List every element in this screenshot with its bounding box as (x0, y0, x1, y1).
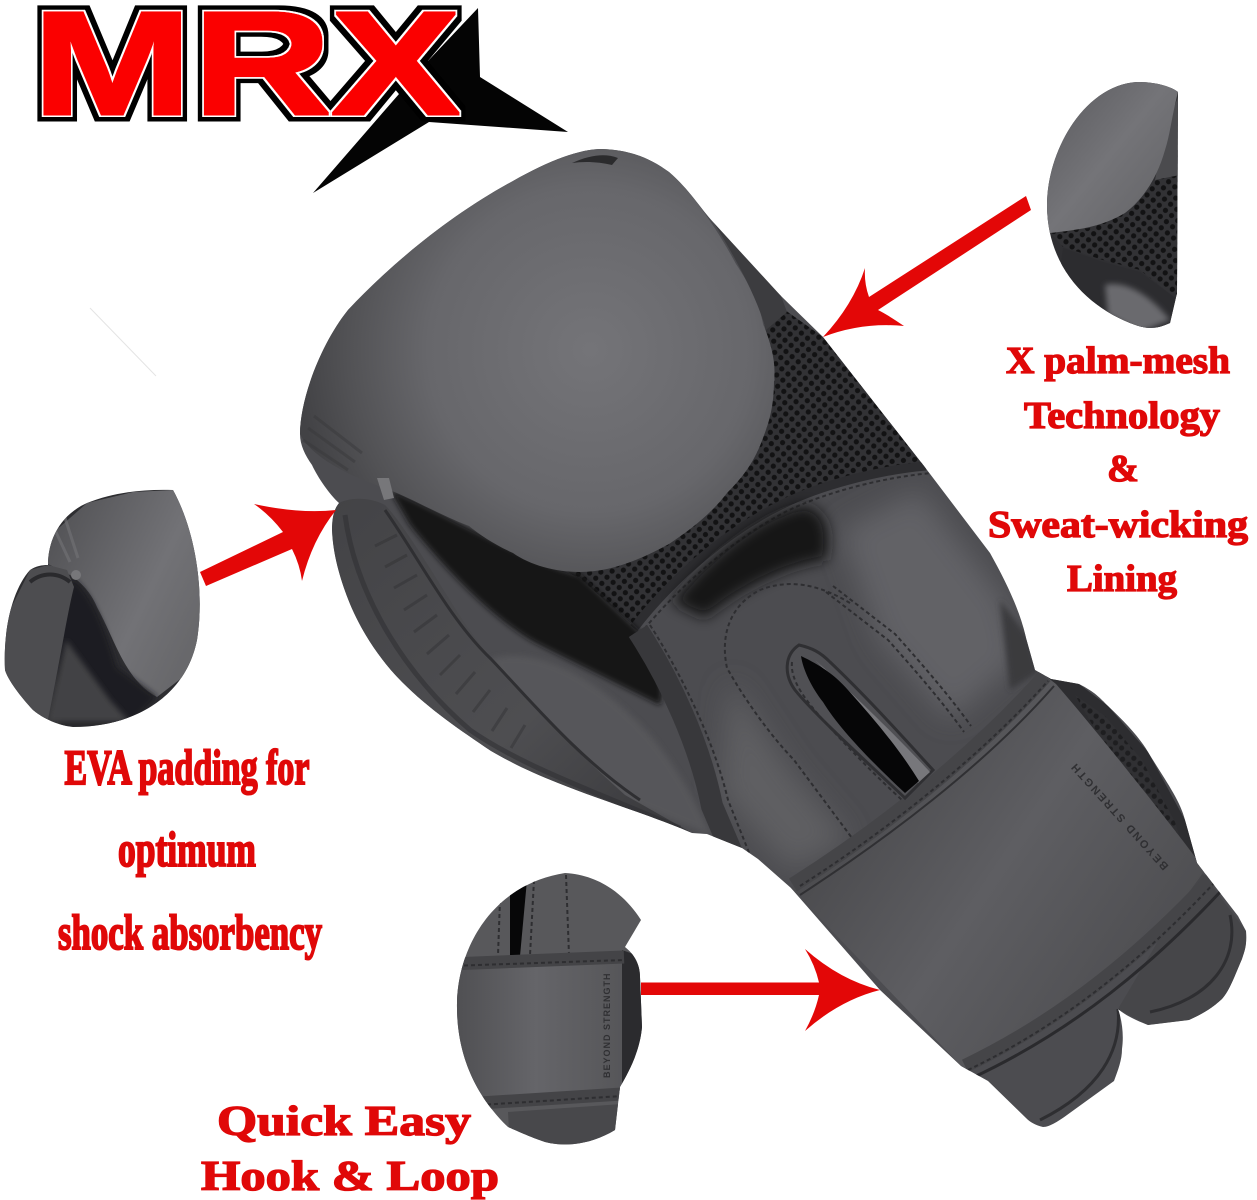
inset wrinkles (55, 518, 78, 562)
fist vent (572, 155, 618, 165)
callout: EVA padding: EVA padding for (64, 739, 310, 795)
thumb hole stitching (792, 662, 902, 800)
inset strap lower stitching (480, 1096, 622, 1105)
inset mesh (1050, 150, 1178, 300)
strap top piping dark edge (800, 686, 1054, 895)
lower palm highlight (720, 702, 840, 865)
arrow: EVA padding (200, 504, 336, 586)
fist knuckle wrinkles (303, 416, 362, 470)
shaded glove interior (332, 300, 1246, 1120)
mesh panel (565, 300, 924, 626)
strap lower piping (965, 878, 1212, 1066)
glove silhouette (300, 149, 1246, 1127)
inset lower pad (1061, 263, 1176, 328)
faint stray line (90, 308, 156, 376)
callout: hook and loop (201, 1099, 499, 1200)
palm seam stitching (640, 473, 932, 634)
palm highlights (840, 490, 1020, 720)
callout: palm mesh (988, 340, 1248, 600)
thumb hole light lip (815, 660, 930, 783)
strap print: BEYOND STRENGTH (1068, 759, 1171, 872)
inset slot (510, 880, 527, 956)
inset: EVA padding (0, 485, 205, 735)
fist upper-right shoulder (714, 223, 787, 330)
strap top stitching (800, 681, 1048, 886)
thumb wrinkles (375, 535, 525, 748)
thumb roll (332, 499, 692, 833)
thumb inner panel (491, 656, 710, 835)
inset strap top stitching (450, 960, 624, 966)
callout: palm mesh: & (1107, 448, 1139, 490)
inset strap top piping (450, 957, 624, 964)
inset right strip (1155, 98, 1178, 180)
wrist strap (791, 674, 1205, 1070)
rear velcro (1045, 675, 1200, 868)
inset palm panel (47, 640, 130, 722)
callout: EVA padding: optimum (118, 821, 256, 877)
thumb seam (385, 510, 640, 800)
callout: palm mesh: Lining (1067, 558, 1177, 600)
inset fist (1047, 82, 1178, 233)
inset velcro (622, 950, 650, 1090)
lower cuff lobes (1146, 930, 1246, 1025)
callout: hook and loop: Hook & Loop (201, 1154, 499, 1200)
thumb hole surround (787, 645, 933, 798)
callout: hook and loop: Quick Easy (217, 1099, 471, 1145)
fist (300, 149, 775, 572)
palm upper stitching second row (833, 586, 971, 726)
inset thumb (0, 565, 74, 730)
callout: palm mesh: Technology (1024, 395, 1220, 437)
arrow: palm mesh (823, 196, 1031, 337)
inset thumb seam (30, 574, 70, 582)
callout: palm mesh: Sweat-wicking (988, 504, 1248, 546)
strap lower piping dark edge (972, 890, 1222, 1078)
inset base (1047, 82, 1178, 328)
inset: palm mesh (1047, 82, 1178, 328)
rear velcro mesh (1077, 698, 1176, 826)
inset fist (40, 490, 205, 697)
inset strap print: BEYOND STRENGTH (602, 972, 612, 1078)
inset lower lobe (508, 1104, 622, 1150)
palm pad stitching (725, 584, 852, 838)
palm upper stitching (826, 592, 964, 732)
inset strap lower piping (480, 1094, 622, 1103)
inset stitch knot (71, 570, 81, 580)
side band (638, 631, 735, 860)
callout: EVA padding: shock absorbency (58, 904, 322, 960)
cuff lobe seam (1040, 915, 1232, 1120)
dark gap between fist and thumb (390, 490, 662, 705)
right crease (1000, 600, 1038, 690)
palm seam band (634, 466, 926, 628)
main glove (300, 149, 1246, 1127)
stitch knot (377, 478, 394, 500)
inset pad highlight (1105, 284, 1170, 332)
thumb hole opening (801, 656, 919, 793)
callout: palm mesh: X palm-mesh (1006, 340, 1230, 382)
logo: MRX (32, 0, 568, 193)
inset base (450, 868, 650, 1153)
inset vertical stitching (498, 875, 569, 955)
inset strap (450, 955, 622, 1104)
inset: hook and loop (450, 868, 650, 1153)
side band stitching (650, 625, 750, 855)
arrow: hook and loop (641, 949, 880, 1031)
dark palm shadow (672, 505, 828, 618)
logo star (313, 8, 568, 193)
strap top piping (793, 676, 1045, 885)
strap lower stitching (968, 882, 1215, 1070)
inset base (0, 485, 205, 735)
thumb roll rim (345, 515, 680, 828)
callout: EVA padding (58, 739, 322, 960)
inset dark gap (55, 578, 157, 725)
